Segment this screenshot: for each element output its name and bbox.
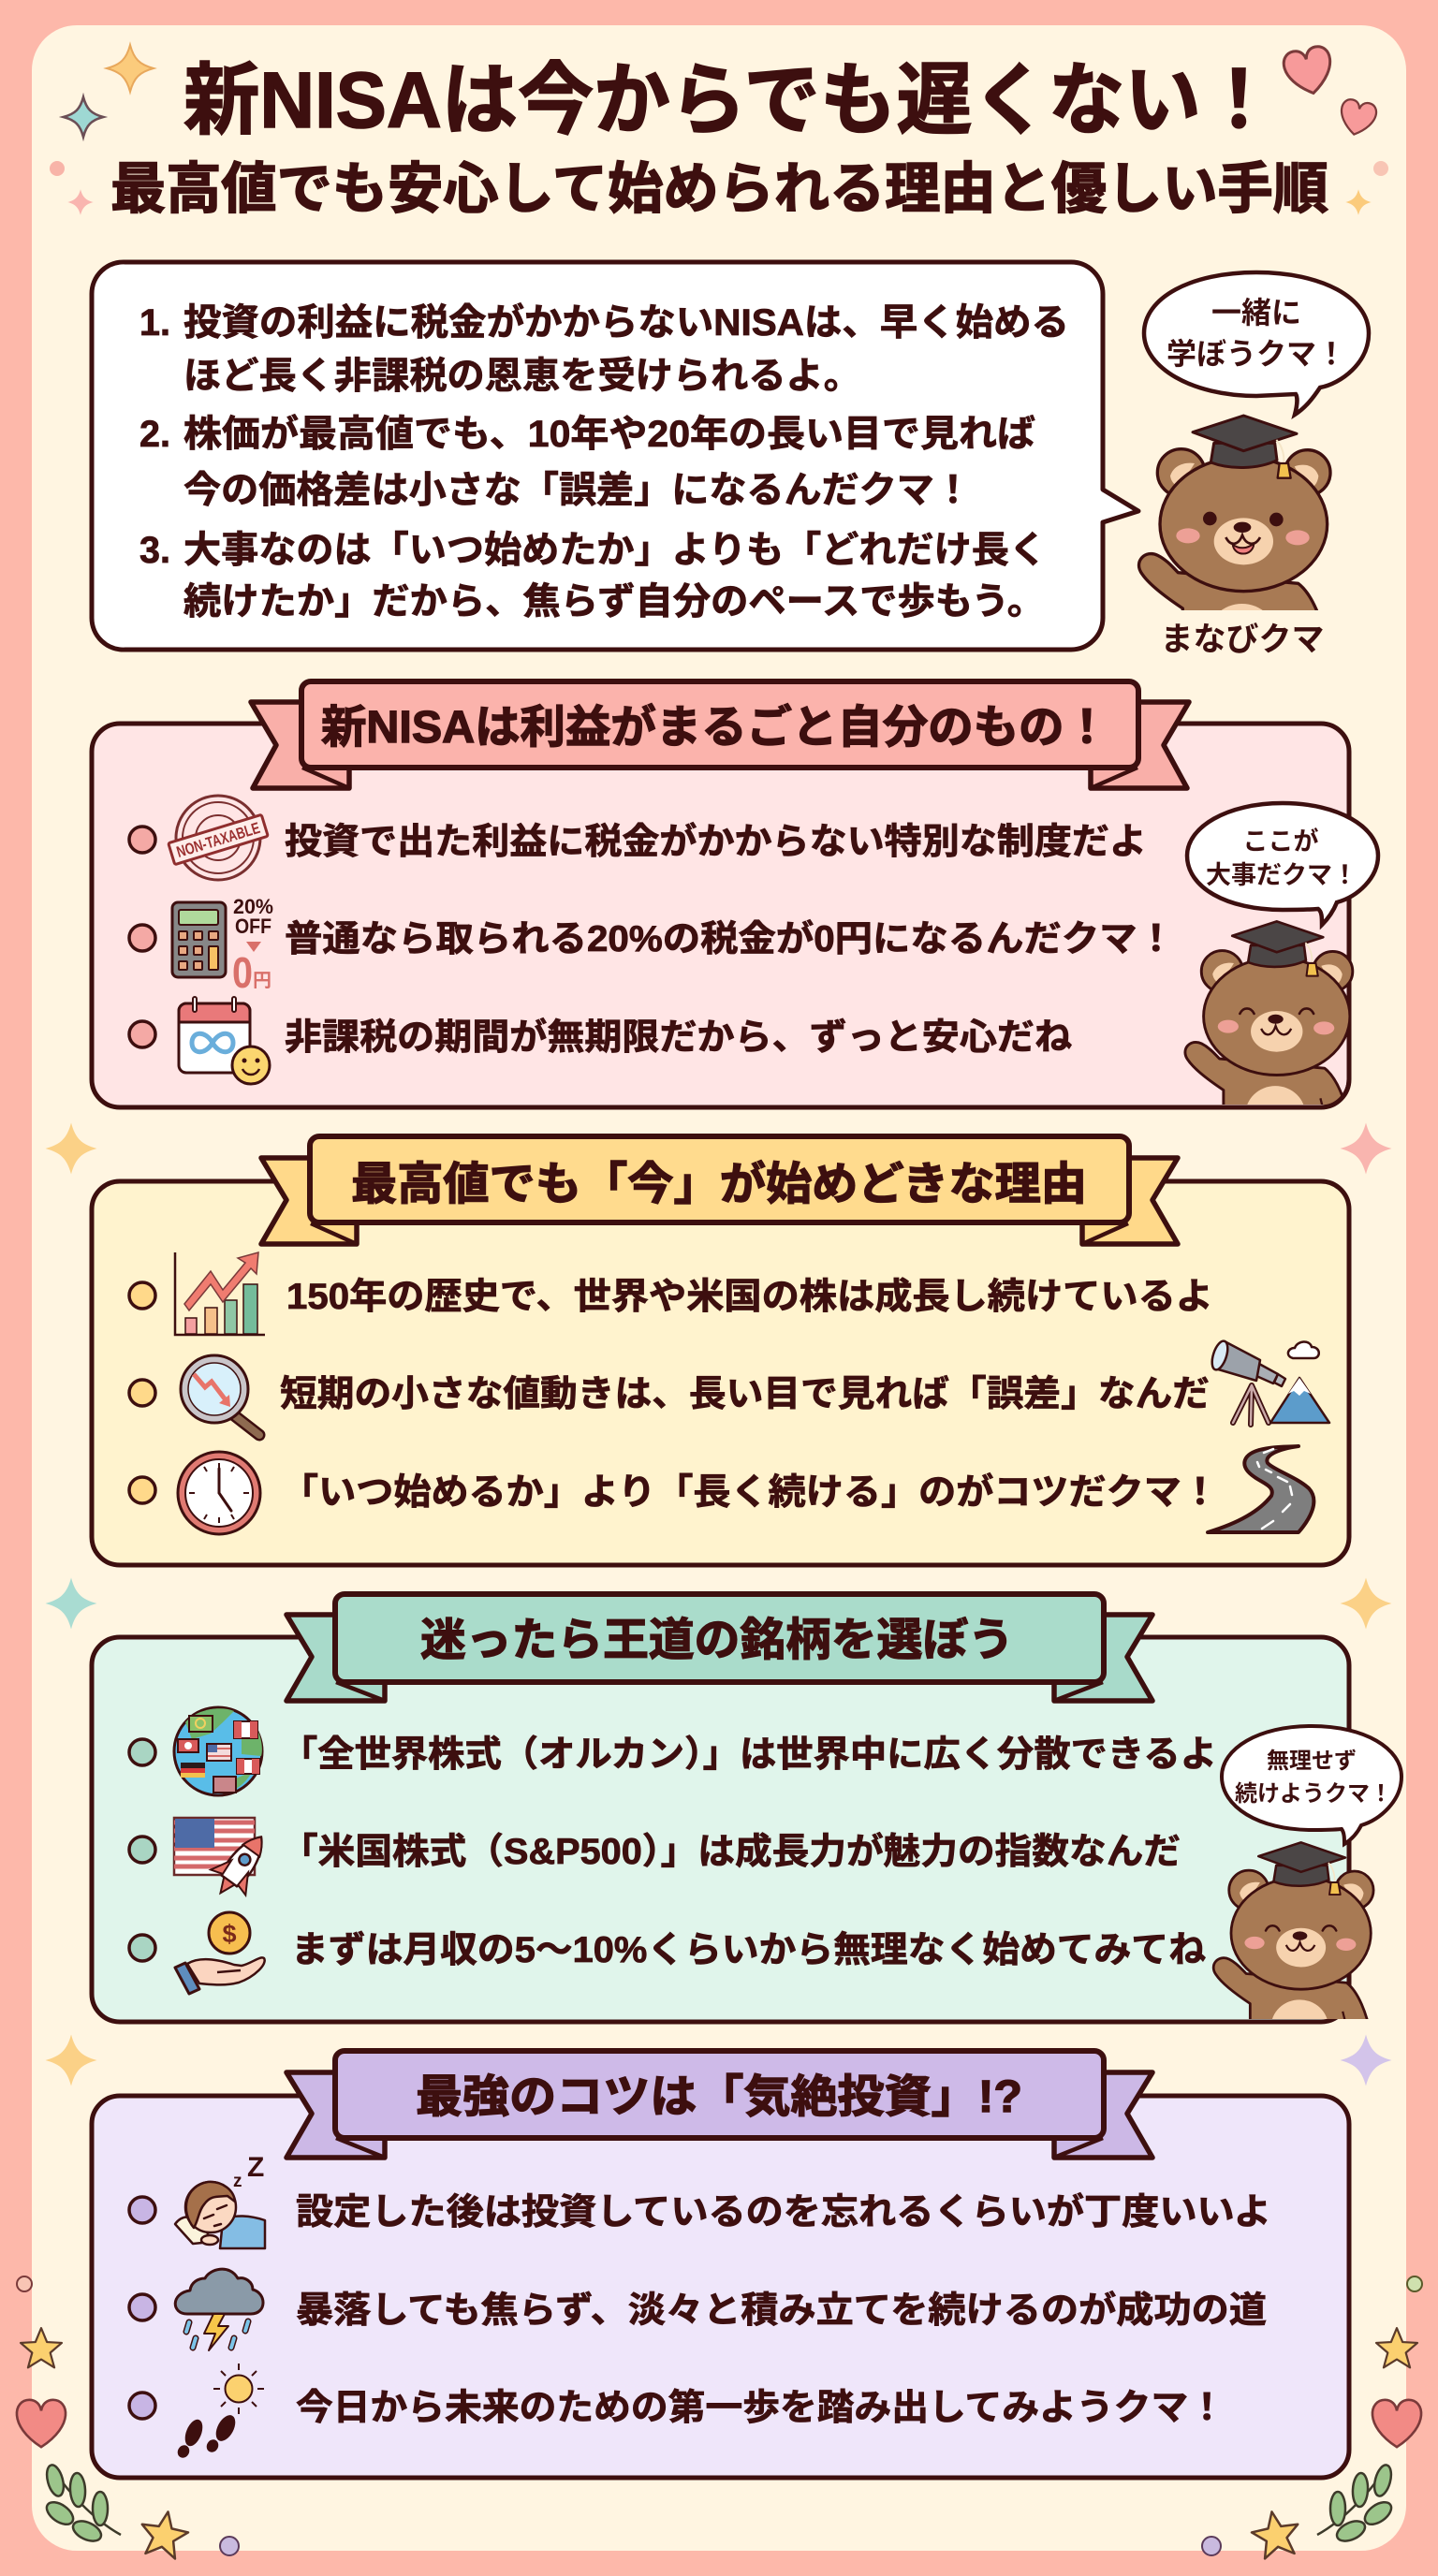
intro point 3: 続けたか」だから、焦らず自分のペースで歩もう。 — [183, 581, 1045, 622]
decoration: sparkles row 4 — [45, 2035, 1391, 2086]
intro point 2: 株価が最高値でも、10年や20年の長い目で見れば — [183, 414, 1035, 455]
item 1.3: 非課税の期間が無期限だから、ずっと安心だね — [285, 1017, 1072, 1058]
icon: coin and hand — [175, 1912, 265, 1994]
item 3.1: 「全世界株式（オルカン）」は世界中に広く分散できるよ — [281, 1734, 1217, 1775]
item 2.2: 短期の小さな値動きは、長い目で見れば「誤差」なんだ — [280, 1374, 1210, 1414]
intro point 3: 3. — [139, 530, 170, 571]
speech bubble: important — [1187, 803, 1378, 925]
panel border over bear — [1208, 1062, 1349, 1107]
icon: calculator 20% off: 20% — [233, 895, 273, 918]
banner: section 1: 新NISAは利益がまるごと自分のもの！ — [321, 703, 1109, 753]
item 1.1: 投資で出た利益に税金がかからない特別な制度だよ — [285, 822, 1147, 862]
item 2.3: 「いつ始めるか」より「長く続ける」のがコツだクマ！ — [281, 1472, 1219, 1513]
icon: winding road — [1208, 1446, 1313, 1532]
intro point 2: 今の価格差は小さな「誤差」になるんだクマ！ — [183, 470, 972, 511]
banner: section 2: 最高値でも「今」が始めどきな理由 — [351, 1160, 1087, 1209]
banner: section 4 — [286, 2051, 1152, 2158]
item 1.2: 普通なら取られる20%の税金が0円になるんだクマ！ — [285, 919, 1175, 959]
intro point 1: ほど長く非課税の恩恵を受けられるよ。 — [183, 356, 861, 397]
icon: clock — [178, 1452, 260, 1534]
icon: storm cloud — [175, 2269, 263, 2350]
panel: section 1 — [92, 681, 1349, 1107]
icon: non-taxable stamp: NON-TAXABLE — [174, 819, 262, 861]
speech bubble: important: 大事だクマ！ — [1206, 861, 1357, 889]
intro point 1 — [139, 302, 1069, 397]
speech bubble: learn together: 学ぼうクマ！ — [1167, 337, 1346, 371]
icon: calculator 20% off — [172, 895, 273, 997]
intro point 3: 大事なのは「いつ始めたか」よりも「どれだけ長く — [183, 530, 1047, 571]
icon: globe with flags — [174, 1707, 262, 1795]
icon: telescope and mountain — [1209, 1339, 1329, 1425]
banner: section 4: 最強のコツは「気絶投資」!? — [416, 2072, 1022, 2122]
intro point 1: 1. — [139, 302, 170, 344]
icon: infinity calendar — [179, 999, 270, 1084]
speech bubble: keep going: 続けようクマ！ — [1235, 1781, 1392, 1807]
item 4.1: 設定した後は投資しているのを忘れるくらいが丁度いいよ — [296, 2192, 1271, 2232]
subtitle: 最高値でも安心して始められる理由と優しい手順 — [110, 158, 1328, 220]
panel: intro speech box — [92, 262, 1138, 650]
panel: section 2 — [92, 1136, 1349, 1565]
decoration: sparkles row 2 — [45, 1123, 1391, 1174]
intro point 2 — [139, 414, 1035, 511]
decoration: bottom left cluster — [17, 2276, 239, 2560]
icon: bear mascot with cap — [1139, 416, 1330, 669]
icon: calculator 20% off: OFF — [235, 915, 271, 938]
icon: coin and hand: $ — [222, 1920, 237, 1948]
label: bear name: まなびクマ — [1160, 622, 1325, 658]
speech bubble: learn together — [1144, 272, 1369, 415]
icon: bear mascot section 1 — [1185, 921, 1353, 1143]
item 4.3: 今日から未来のための第一歩を踏み出してみようクマ！ — [296, 2388, 1225, 2428]
banner: section 2 — [261, 1136, 1178, 1244]
icon: sleeping person: z — [233, 2172, 242, 2191]
icon: non-taxable stamp — [169, 796, 268, 880]
intro point 3 — [139, 530, 1047, 622]
icon: bear mascot section 3 — [1213, 1842, 1373, 2055]
intro point 2: 2. — [139, 414, 170, 455]
icon: sun and footprints — [175, 2364, 264, 2460]
speech bubble: keep going: 無理せず — [1267, 1749, 1357, 1774]
icon: calculator 20% off: 円 — [253, 971, 271, 991]
decoration: sparkles row 3 — [45, 1578, 1391, 1629]
item 2.1: 150年の歴史で、世界や米国の株は成長し続けているよ — [286, 1277, 1213, 1317]
icon: magnifier — [181, 1355, 259, 1435]
item 4.2: 暴落しても焦らず、淡々と積み立てを続けるのが成功の道 — [296, 2291, 1267, 2331]
panel corner over bear — [1292, 1079, 1365, 1116]
intro point 1: 投資の利益に税金がかからないNISAは、早く始める — [183, 302, 1069, 344]
item 3.3: まずは月収の5〜10%くらいから無理なく始めてみてね — [291, 1930, 1206, 1970]
decoration: top sparkles and hearts — [50, 44, 1388, 215]
panel: section 3 — [92, 1594, 1349, 2022]
banner: section 3: 迷ったら王道の銘柄を選ぼう — [420, 1616, 1014, 1665]
icon: rising chart — [175, 1252, 265, 1335]
icon: US flag and rocket — [174, 1818, 279, 1906]
speech bubble: learn together: 一緒に — [1211, 296, 1301, 329]
banner: section 3 — [286, 1594, 1152, 1701]
item 3.2: 「米国株式（S&P500）」は成長力が魅力の指数なんだ — [281, 1832, 1181, 1872]
panel: section 4 — [92, 2051, 1349, 2478]
speech bubble: keep going — [1222, 1726, 1401, 1844]
title: 新NISAは今からでも遅くない！ — [183, 56, 1277, 144]
banner: section 1 — [251, 681, 1189, 788]
decoration: bottom right cluster — [1202, 2276, 1422, 2560]
icon: sleeping person: Z — [247, 2152, 264, 2183]
speech bubble: important: ここが — [1243, 827, 1318, 856]
icon: calculator 20% off: 0 — [232, 948, 253, 997]
icon: sleeping person — [175, 2152, 265, 2248]
